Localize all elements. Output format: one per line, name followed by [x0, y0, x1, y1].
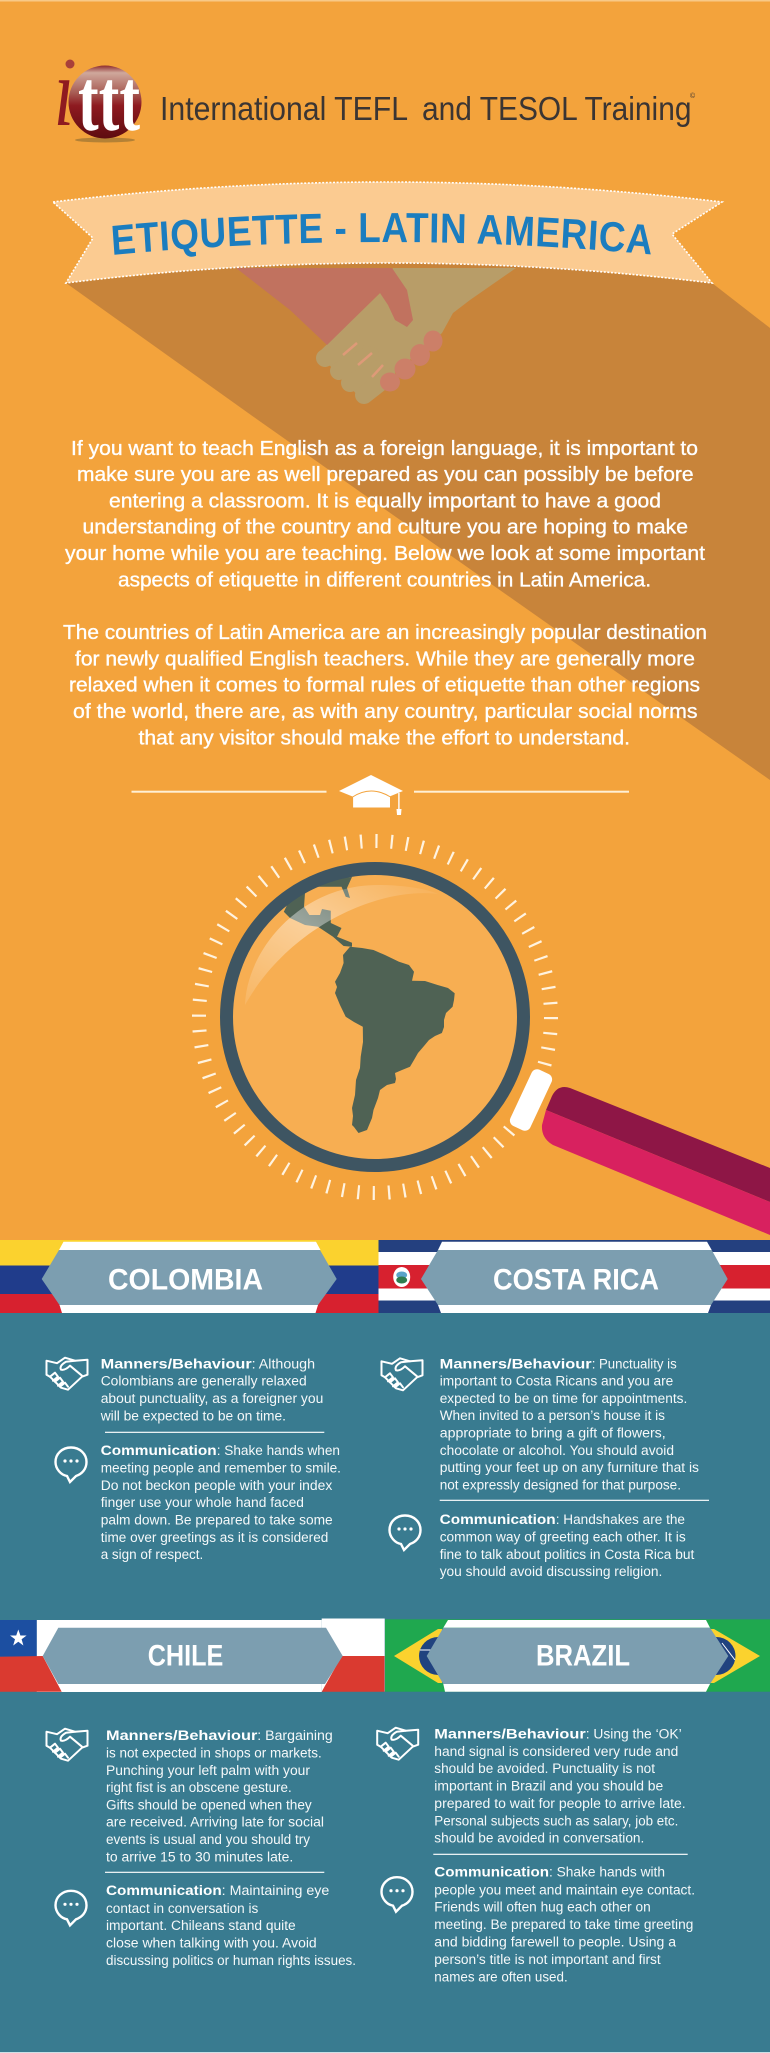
manners text: Manners/Behaviour — [106, 1728, 258, 1744]
communication text: person’s title is not important and first — [434, 1952, 661, 1968]
communication text: : Maintaining eye — [222, 1883, 329, 1899]
map: South America — [284, 877, 455, 1133]
manners text — [434, 1726, 686, 1847]
manners text: Punching your left palm with your — [106, 1763, 310, 1779]
icon: handshake — [46, 1358, 88, 1390]
intro paragraph 2: that any visitor should make the effort to understand. — [138, 726, 630, 749]
communication text: time over greetings as it is considered — [101, 1530, 328, 1546]
magnifying glass — [199, 841, 770, 1235]
logo: © — [690, 92, 696, 100]
ring — [226, 868, 524, 1166]
header: Chile: CHILE — [148, 1640, 223, 1673]
icon: handshake — [46, 1729, 88, 1761]
teal panel — [0, 1313, 770, 2053]
manners text: important to Costa Ricans and you are — [440, 1374, 673, 1390]
communication text: finger use your whole hand faced — [101, 1495, 304, 1511]
lens — [232, 874, 518, 1160]
icon: handshake — [382, 1358, 422, 1390]
communication text: Communication — [440, 1512, 556, 1528]
communication text: you should avoid discussing religion. — [440, 1564, 662, 1580]
lens gloss — [245, 885, 438, 1005]
manners text: : Although — [252, 1356, 315, 1372]
intro paragraph 1: aspects of etiquette in different countries in Latin America. — [118, 568, 651, 591]
logo: ttt — [78, 53, 140, 150]
communication text: meeting. Be prepared to take time greeting — [434, 1917, 693, 1933]
emblem — [393, 1267, 410, 1287]
header: Costa Rica — [378, 1240, 770, 1313]
manners text: events is usual and you should try — [106, 1832, 311, 1848]
communication text: Communication — [434, 1865, 549, 1881]
intro paragraph 1: understanding of the country and culture you are hoping to make — [82, 516, 688, 539]
communication text: fine to talk about politics in Costa Rica but — [440, 1547, 694, 1563]
communication text: : Shake hands with — [549, 1865, 665, 1881]
communication text: : Shake hands when — [217, 1443, 340, 1459]
panel: Costa Rica — [382, 1356, 709, 1580]
communication text: a sign of respect. — [101, 1547, 203, 1563]
header: Brazil — [385, 1619, 770, 1692]
panel: Colombia — [46, 1356, 341, 1563]
title: ETIQUETTE - LATIN AMERICA — [112, 213, 651, 257]
communication text: discussing politics or human rights issues. — [106, 1953, 356, 1969]
orange background — [0, 0, 770, 1320]
manners text — [106, 1728, 333, 1866]
intro paragraph 2: of the world, there are, as with any country, particular social norms — [73, 700, 698, 723]
manners text: hand signal is considered very rude and — [434, 1744, 678, 1760]
manners text: chocolate or alcohol. You should avoid — [440, 1443, 674, 1459]
manners text: : Punctuality is — [592, 1356, 677, 1372]
manners text: Gifts should be opened when they — [106, 1797, 313, 1813]
intro paragraph 2: for newly qualified English teachers. While they are generally more — [75, 647, 695, 670]
panel: Chile — [46, 1728, 356, 1969]
logo: and TESOL Training — [422, 90, 692, 127]
intro paragraph 2: relaxed when it comes to formal rules of etiquette than other regions — [69, 674, 700, 697]
manners text: Manners/Behaviour — [101, 1356, 252, 1372]
manners text: to arrive 15 to 30 minutes late. — [106, 1850, 293, 1866]
manners text: should be avoided in conversation. — [434, 1831, 644, 1847]
handle — [546, 1087, 770, 1202]
icon: speech bubble — [390, 1516, 420, 1550]
communication text — [101, 1443, 341, 1563]
logo: ı — [54, 39, 74, 147]
communication text: names are often used. — [434, 1970, 568, 1986]
intro paragraph 1: make sure you are as well prepared as you can possibly be before — [77, 463, 694, 486]
communication text: Do not beckon people with your index — [101, 1478, 332, 1494]
manners text: are received. Arriving late for social — [106, 1815, 324, 1831]
communication text: important. Chileans stand quite — [106, 1918, 296, 1934]
manners text: important in Brazil and you should be — [434, 1779, 663, 1795]
title banner — [52, 181, 724, 284]
intro paragraph 2: The countries of Latin America are an increasingly popular destination — [63, 621, 707, 644]
panel: Brazil — [377, 1726, 695, 1986]
manners text: will be expected to be on time. — [100, 1408, 286, 1424]
manners text: about punctuality, as a foreigner you — [101, 1391, 323, 1407]
communication text: : Handshakes are the — [556, 1512, 685, 1528]
tick ring — [199, 841, 551, 1193]
manners text: putting your feet up on any furniture that is — [440, 1460, 699, 1476]
intro paragraph 1: entering a classroom. It is equally important to have a good — [109, 489, 661, 512]
manners text: : Using the ‘OK’ — [586, 1726, 682, 1742]
header: Chile — [0, 1618, 385, 1692]
long shadow of banner — [66, 250, 770, 780]
communication text: common way of greeting each other. It is — [440, 1530, 686, 1546]
manners text — [440, 1356, 699, 1494]
communication text — [434, 1865, 695, 1986]
manners text: expected to be on time for appointments. — [440, 1391, 687, 1407]
logo — [54, 39, 696, 150]
manners text: Manners/Behaviour — [434, 1726, 586, 1742]
manners text — [100, 1356, 323, 1424]
manners text: right fist is an obscene gesture. — [106, 1780, 292, 1796]
manners text: prepared to wait for people to arrive late. — [434, 1796, 686, 1812]
communication text: Communication — [101, 1443, 217, 1459]
communication text: people you meet and maintain eye contact. — [434, 1882, 695, 1898]
header: Costa Rica: COSTA RICA — [493, 1263, 659, 1296]
icon: graduation cap — [339, 775, 403, 815]
intro paragraph 1 — [65, 437, 705, 591]
manners text: is not expected in shops or markets. — [106, 1745, 322, 1761]
icon: speech bubble — [382, 1877, 412, 1912]
header: Colombia: COLOMBIA — [108, 1263, 263, 1296]
logo: International TEFL — [160, 90, 408, 127]
header: Colombia — [0, 1240, 378, 1313]
intro paragraph 2 — [63, 621, 707, 749]
communication text: palm down. Be prepared to take some — [101, 1512, 333, 1528]
communication text: Communication — [106, 1883, 222, 1899]
manners text: Personal subjects such as salary, job etc. — [434, 1813, 678, 1829]
manners text: : Bargaining — [257, 1728, 333, 1744]
manners text: Manners/Behaviour — [440, 1356, 592, 1372]
communication text: meeting people and remember to smile. — [101, 1461, 341, 1477]
communication text: close when talking with you. Avoid — [106, 1936, 317, 1952]
icon: speech bubble — [56, 1448, 86, 1482]
icon: handshake — [236, 268, 516, 400]
handle collar — [508, 1067, 554, 1133]
manners text: Colombians are generally relaxed — [101, 1374, 307, 1390]
icon: handshake — [377, 1728, 418, 1760]
manners text: appropriate to bring a gift of flowers, — [440, 1426, 666, 1442]
communication text — [440, 1512, 694, 1580]
communication text: Friends will often hug each other on — [434, 1900, 651, 1916]
communication text: and bidding farewell to people. Using a — [434, 1935, 676, 1951]
communication text: contact in conversation is — [106, 1901, 258, 1917]
icon: speech bubble — [56, 1891, 86, 1925]
communication text — [106, 1883, 356, 1969]
manners text: When invited to a person’s house it is — [440, 1408, 665, 1424]
manners text: should be avoided. Punctuality is not — [434, 1761, 655, 1777]
manners text: not expressly designed for that purpose. — [440, 1478, 681, 1494]
header: Brazil: BRAZIL — [536, 1640, 630, 1673]
intro paragraph 1: your home while you are teaching. Below we look at some important — [65, 542, 705, 565]
intro paragraph 1: If you want to teach English as a foreign language, it is important to — [71, 437, 698, 460]
